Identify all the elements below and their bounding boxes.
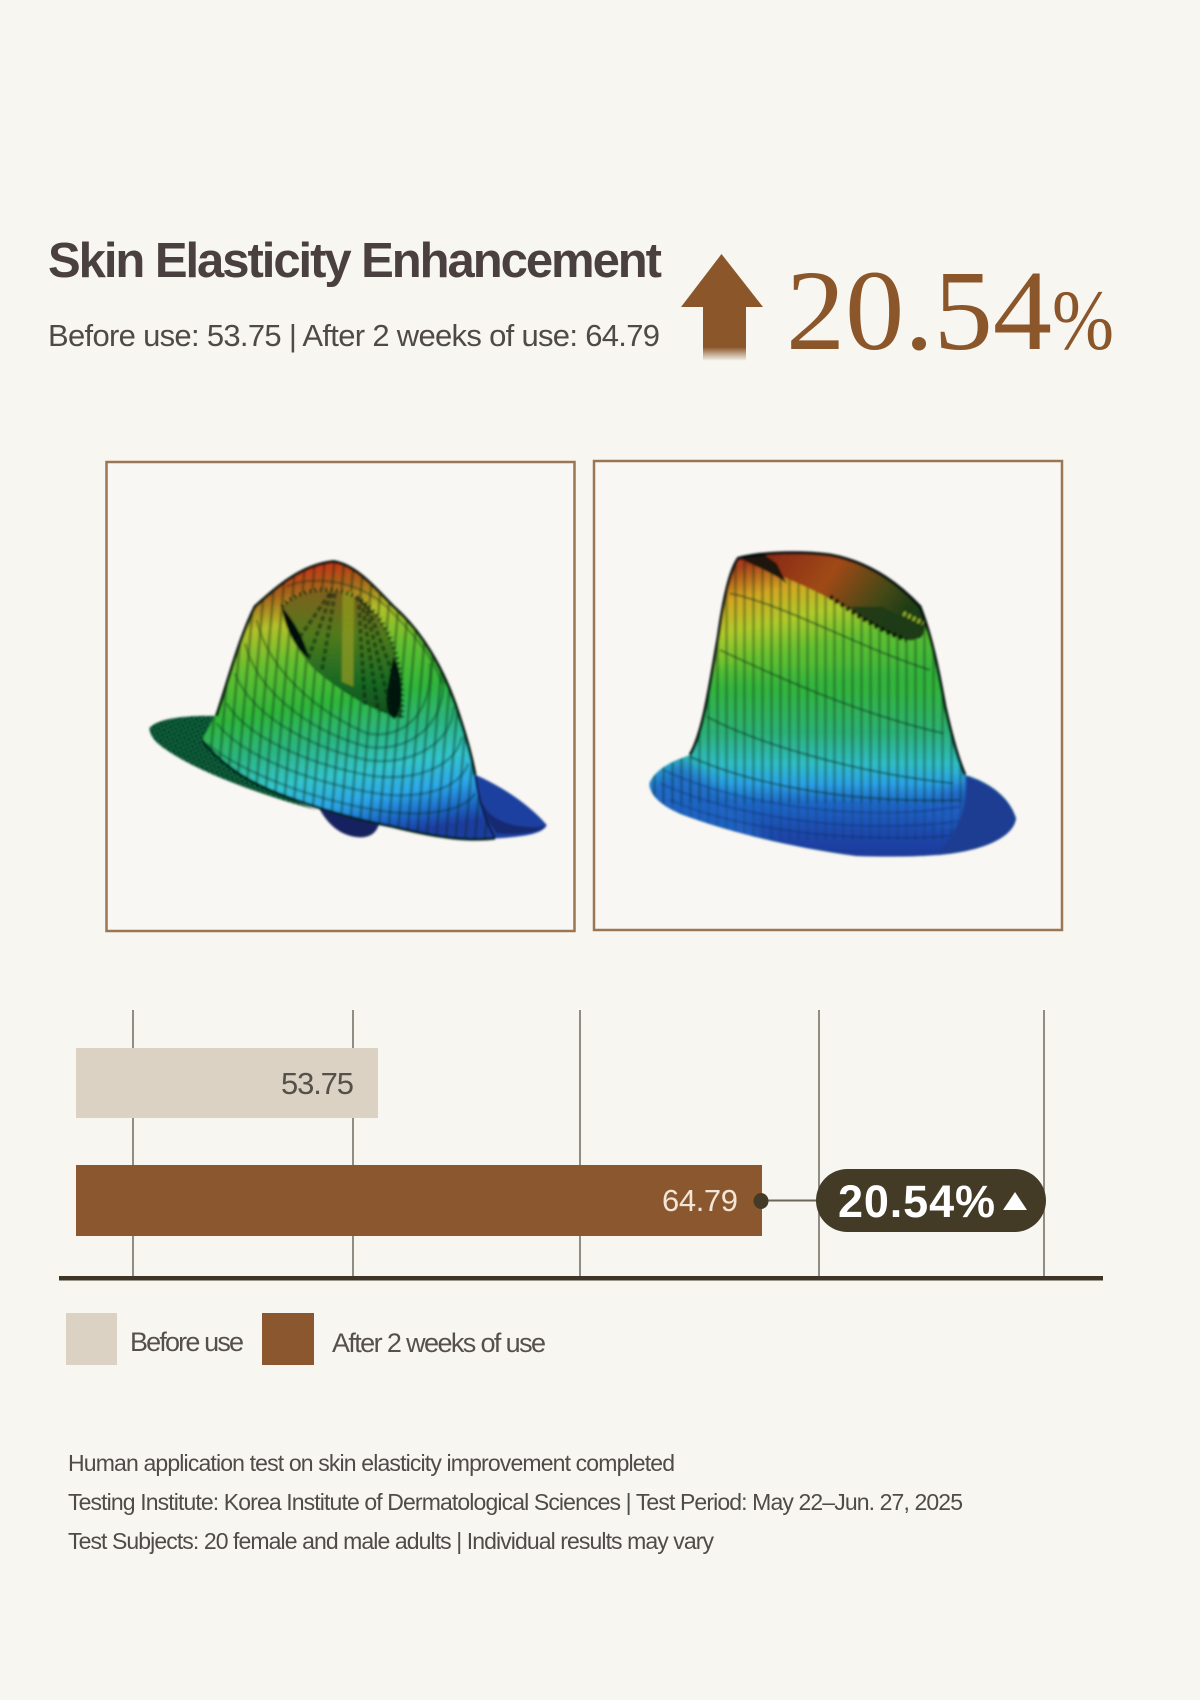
infographic canvas (49, 242, 1112, 1554)
callout: 20.54% increase (816, 1169, 1046, 1232)
sub-element: shallow top opening of the surface (738, 553, 925, 641)
bar: before use (76, 1048, 378, 1118)
bar: after 2 weeks of use (76, 1165, 762, 1236)
title: Skin Elasticity Enhancement (48, 234, 662, 288)
callout: 20.54% increase: 20.54% (838, 1176, 995, 1227)
icon: up arrow (681, 254, 763, 361)
panel: after 2 weeks elasticity graph (594, 461, 1062, 930)
chart baseline (59, 1276, 1103, 1280)
legend item: before use: Before use (130, 1327, 244, 1357)
legend item: before use (66, 1313, 244, 1365)
legend item: after 2 weeks of use: After 2 weeks of use (332, 1328, 546, 1358)
headline percentage: % (1052, 272, 1114, 368)
test details footnote: Testing Institute: Korea Institute of Dermatological Sciences | Test Period: May 22–Jun. 27, 2025 (68, 1489, 963, 1515)
test details footnote: Human application test on skin elasticity improvement completed (68, 1450, 675, 1476)
icon: before 3D hat-shaped elasticity surface (149, 550, 547, 850)
panel: before use elasticity graph (106, 462, 574, 931)
bar: after 2 weeks of use: 64.79 (662, 1183, 738, 1218)
legend item: after 2 weeks of use (262, 1313, 546, 1365)
legend (66, 1313, 546, 1365)
chart grid lines (133, 1010, 1044, 1278)
test details footnote (68, 1450, 963, 1554)
callout connector (754, 1193, 818, 1209)
subtitle: before and after values: Before use: 53.75 | After 2 weeks of use: 64.79 (48, 318, 660, 353)
bar: before use: 53.75 (281, 1066, 354, 1101)
test details footnote: Test Subjects: 20 female and male adults | Individual results may vary (68, 1528, 714, 1554)
bar chart (59, 1010, 1103, 1280)
sub-element: hollow interior of the surface (282, 590, 402, 719)
headline percentage: 20.54 (786, 247, 1052, 374)
icon: after 3D hat-shaped elasticity surface (637, 547, 1023, 863)
